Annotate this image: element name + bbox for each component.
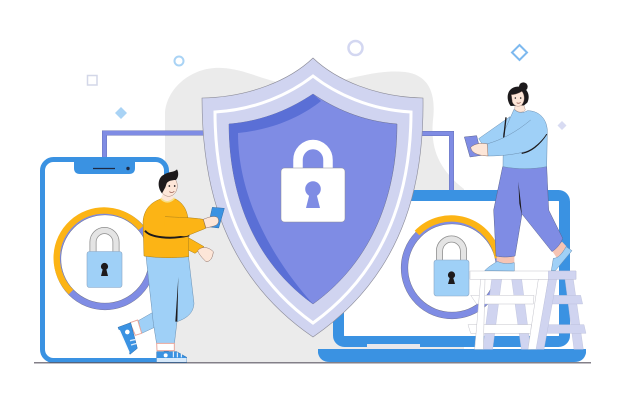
back leg: [138, 312, 156, 333]
trousers: [494, 166, 563, 257]
upper arm: [165, 217, 206, 236]
background blob: [165, 68, 464, 362]
hand: [471, 143, 488, 156]
laptop padlock: [434, 239, 469, 296]
face details: [169, 183, 175, 188]
strap: [145, 231, 189, 238]
ground line: [34, 362, 591, 364]
shield inner face: [229, 94, 397, 304]
ladder back legs and rungs: [483, 279, 586, 349]
face: [511, 91, 524, 106]
phone padlock: [87, 230, 122, 288]
ladder front frame: [468, 271, 576, 349]
sweater: [503, 109, 547, 169]
hair: [159, 169, 178, 193]
standing foot: [497, 256, 514, 264]
hair bun: [519, 82, 528, 91]
phone progress ring: [57, 211, 152, 306]
front shoe: [157, 352, 187, 362]
shield: [202, 58, 423, 337]
laptop: [318, 196, 586, 362]
sweater: [143, 198, 189, 258]
lower arm: [185, 237, 204, 253]
hair back: [508, 87, 529, 106]
decorative shapes: [88, 41, 566, 130]
connector lines: [104, 133, 452, 191]
neck: [515, 103, 525, 112]
phone: [42, 158, 166, 360]
ladder: [468, 271, 586, 349]
head: [160, 176, 177, 196]
neck and collar: [161, 193, 174, 202]
phone notch: [74, 158, 135, 174]
face details: [515, 96, 521, 100]
laptop progress ring: [404, 218, 500, 316]
hand: [203, 217, 219, 228]
shield padlock: [281, 144, 345, 222]
shield inner shade: [229, 94, 321, 304]
held phone: [208, 207, 224, 228]
laptop base: [318, 349, 586, 362]
man with phone: [118, 169, 224, 362]
front leg: [146, 255, 194, 344]
shield white band: [215, 76, 411, 323]
held phone: [464, 136, 481, 157]
woman with phone: [464, 82, 572, 271]
back shoe: [118, 323, 137, 354]
raised foot: [553, 242, 567, 259]
front arm: [487, 120, 547, 156]
back arm: [479, 117, 510, 148]
strap: [504, 117, 547, 153]
